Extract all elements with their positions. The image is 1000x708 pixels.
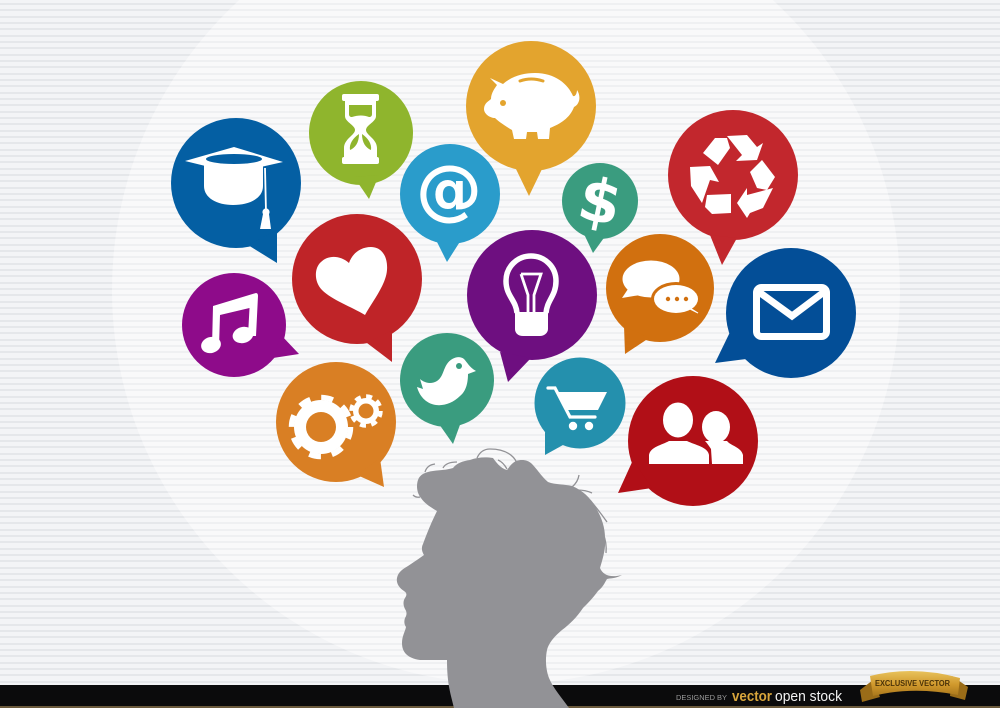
icon: chat bubbles: [622, 260, 701, 316]
bubble: cart: [534, 358, 626, 455]
icon: dollar: $: [572, 163, 627, 241]
badge: exclusive vector: [860, 671, 968, 702]
bubble: chat: [606, 234, 714, 354]
bubble: mail: [715, 248, 856, 378]
icon: hourglass: [342, 94, 379, 164]
icon: recycle: [690, 135, 775, 218]
icon: at sign: @: [416, 151, 482, 228]
icon: people: [649, 402, 743, 464]
bubble: at sign: [400, 144, 500, 262]
bubble: heart: [292, 214, 422, 362]
icon: heart: [316, 247, 387, 315]
footer credit: open stock: [775, 689, 843, 705]
icon: graduation cap: [185, 147, 283, 229]
badge: exclusive vector: EXCLUSIVE VECTOR: [875, 679, 950, 688]
bubble: dollar: [562, 163, 638, 253]
icon: music note: [199, 293, 258, 355]
bubble: light bulb: [467, 230, 597, 382]
bubble: piggy bank: [466, 41, 596, 196]
bubble: hourglass: [309, 81, 413, 199]
bubble: gears: [276, 362, 396, 487]
hair wisps: [413, 449, 607, 553]
footer credit: DESIGNED BY: [676, 693, 727, 702]
footer credit: [676, 688, 843, 705]
icon: light bulb: [506, 256, 556, 336]
head silhouette: [397, 457, 622, 708]
icon: shopping cart: [548, 388, 607, 430]
footer bar: [0, 685, 1000, 708]
bubble: music: [182, 273, 299, 377]
icon: bird: [417, 357, 476, 405]
icon: gears: [292, 396, 380, 456]
bubble: graduation cap: [171, 118, 301, 263]
footer credit: vector: [732, 688, 772, 705]
icon: envelope: [756, 288, 826, 336]
bubble: recycle: [668, 110, 798, 265]
bubble: bird: [400, 333, 494, 444]
bubble: people: [618, 376, 758, 506]
icon: piggy bank: [484, 73, 579, 139]
